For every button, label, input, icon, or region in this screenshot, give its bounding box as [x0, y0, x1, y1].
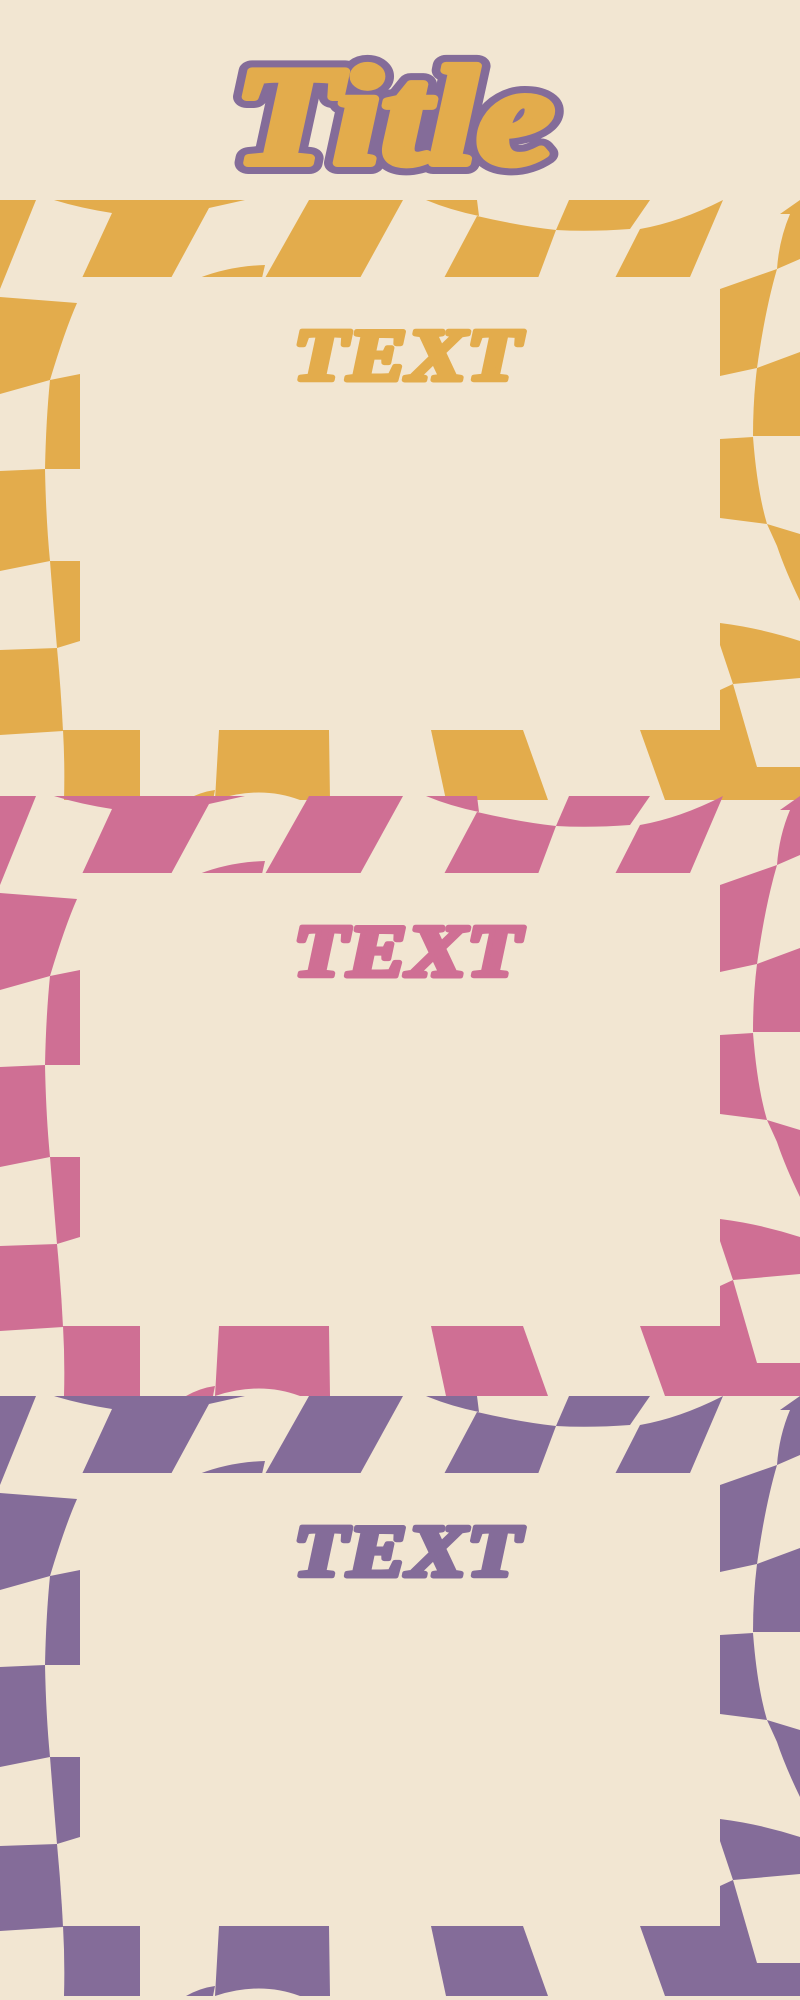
content box 2 [80, 873, 720, 1326]
panel: section 3 (purple) [0, 1396, 800, 1996]
heading 1: TEXT [293, 315, 524, 397]
content box 3 [80, 1473, 720, 1926]
title: Title [234, 39, 554, 194]
checker border: yellow [0, 200, 800, 800]
checker border: purple [0, 1396, 800, 1996]
content box 1 [80, 277, 720, 730]
heading 3: TEXT [293, 1511, 524, 1593]
panel: section 1 (yellow) [0, 200, 800, 800]
checker border: pink [0, 796, 800, 1396]
heading 2: TEXT [293, 911, 524, 993]
title: Title [234, 39, 554, 194]
panel: section 2 (pink) [0, 796, 800, 1396]
